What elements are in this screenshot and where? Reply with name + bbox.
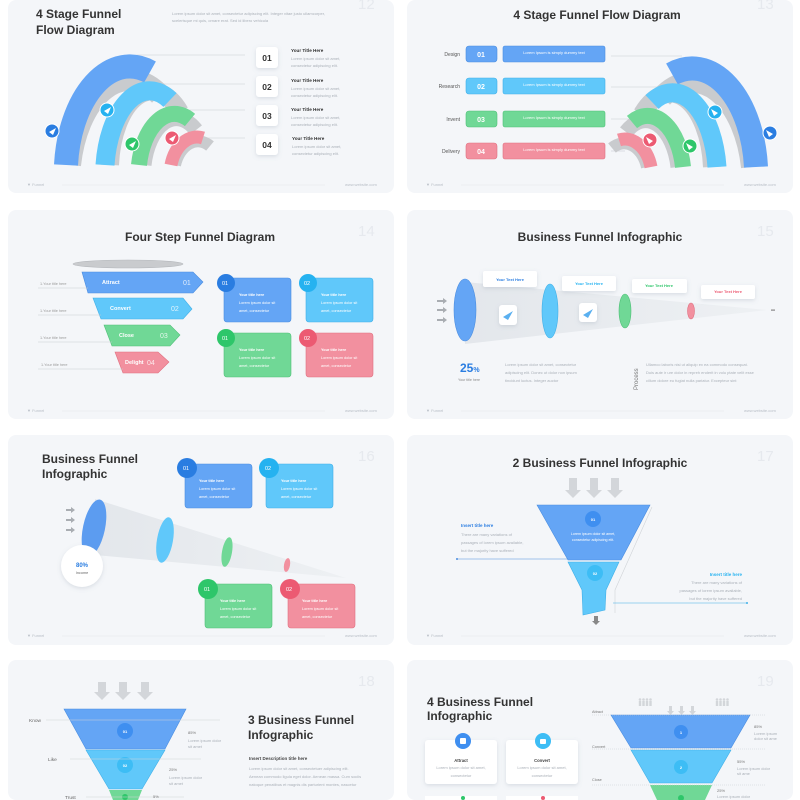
info boxes: amet, consectetur: [220, 615, 251, 619]
footer: www.website.com: [744, 182, 776, 187]
stat 25%: Your title here: [458, 378, 480, 382]
number boxes list: 02: [262, 82, 272, 92]
level labels: Close: [592, 778, 602, 782]
percentages: Lorem ipsum dolor: [188, 738, 222, 743]
text bars: Lorem Ipsum is simply dummy text: [523, 147, 586, 152]
panel: slide 15: [407, 210, 793, 419]
end dash: [771, 310, 775, 311]
info boxes: amet, consectetur: [199, 495, 230, 499]
level labels: Attract: [592, 710, 604, 714]
funnel levels: 1: [680, 730, 683, 735]
percentages: [153, 730, 222, 799]
info boxes: Your title here: [302, 599, 327, 603]
left text: but the majority have suffered: [461, 548, 514, 553]
number boxes: 04: [477, 149, 485, 156]
footer: [27, 182, 377, 187]
slide number 18: 18: [358, 673, 375, 690]
slide number 19: 19: [757, 673, 774, 690]
stat 25%: [458, 361, 480, 382]
input arrows: [94, 682, 153, 700]
number boxes list: [256, 47, 341, 156]
title: Business Funnel: [42, 452, 138, 466]
funnel top: consectetur adipiscing elit.: [572, 538, 614, 542]
panel: slide 18: [8, 660, 394, 800]
footer: ▼ Funnel: [426, 182, 443, 187]
number boxes list: consectetur adipiscing elit.: [291, 122, 338, 127]
chart: slide 13 arcs: [612, 68, 777, 167]
right text: There are many variations of: [691, 580, 743, 585]
input arrows: [66, 507, 75, 533]
footer: www.website.com: [744, 408, 776, 413]
funnel cone: [95, 499, 346, 578]
number boxes: 03: [477, 117, 485, 124]
feature cards: Lorem ipsum dolor sit amet,: [436, 765, 486, 770]
title: 2 Business Funnel Infographic: [513, 456, 688, 470]
footer: [426, 182, 776, 187]
level labels: [29, 718, 76, 800]
title: Infographic: [42, 467, 108, 481]
footer: ▼ Funnel: [27, 633, 44, 638]
title: 4 Stage Funnel Flow Diagram: [513, 8, 681, 22]
input arrows: [437, 298, 447, 323]
feature cards: consectetur: [532, 773, 553, 778]
description text: scelerisque mi quis, ornare erat. Sed id libero vehicula: [172, 18, 269, 23]
feature cards: Lorem ipsum dolor sit amet,: [517, 765, 567, 770]
info boxes: amet, consectetur: [321, 309, 352, 313]
funnel steps: Delight: [125, 360, 144, 366]
chart: slide 12 arcs: [45, 66, 210, 165]
output arrow: [592, 616, 600, 625]
number boxes list: consectetur adipiscing elit.: [292, 151, 339, 156]
funnel levels: [611, 715, 750, 800]
info boxes: 01: [222, 281, 228, 287]
text labels: Your Text Here: [575, 281, 604, 286]
info boxes: 02: [265, 466, 271, 472]
info boxes: Lorem ipsum dolor sit: [239, 356, 276, 360]
description text: Lorem ipsum dolor sit amet, consectetur adipiscing elit. Integer vitae justo ullamcorper,: [172, 11, 325, 16]
footer: [27, 633, 377, 638]
feature cards: Convert: [534, 758, 551, 763]
info boxes: Lorem ipsum dolor sit: [199, 487, 236, 491]
info boxes: Lorem ipsum dolor sit: [239, 301, 276, 305]
stage labels: [439, 52, 461, 155]
number boxes list: Lorem ipsum dolor sit amet,: [291, 56, 340, 61]
right text: but the majority have suffered: [689, 596, 742, 601]
body text: tincidunt luctus. Integer auctor: [505, 378, 559, 383]
number boxes list: consectetur adipiscing elit.: [291, 63, 338, 68]
panel: slide 15: cillum dolore eu fugiat nulla pariatur. Excepteur sint: [646, 378, 737, 383]
info boxes: 01: [222, 336, 228, 342]
info boxes: Your title here: [321, 293, 346, 297]
level labels: Like: [48, 757, 57, 763]
number boxes list: Your Title Here: [291, 107, 324, 112]
side line: [615, 507, 652, 613]
footer: ▼ Funnel: [27, 182, 44, 187]
info boxes: 01: [204, 587, 210, 593]
panel: slide 16: [8, 435, 394, 645]
footer: ▼ Funnel: [426, 408, 443, 413]
funnel steps: [82, 272, 203, 373]
panel: slide 15: Ullamco laboris nisi ut aliquip ex ea commodo consequat.: [646, 362, 748, 367]
funnel steps: Close: [119, 333, 134, 339]
left text: [456, 523, 568, 560]
level labels: [592, 710, 606, 782]
funnel bottom: [568, 562, 619, 615]
funnel top: Lorem ipsum dolor sit amet,: [571, 532, 615, 536]
footer: www.website.com: [345, 408, 377, 413]
percentages: 25%: [169, 767, 177, 772]
left text: Insert title here: [461, 523, 494, 528]
panel: slide 12: [8, 0, 394, 193]
info boxes: Your title here: [199, 479, 224, 483]
info boxes: [217, 274, 373, 377]
percentages: dolor sit ame: [754, 736, 778, 741]
description: Insert Description title here: [249, 756, 308, 761]
panel: slide 14: [8, 210, 394, 419]
info boxes: Your title here: [321, 348, 346, 352]
percentages: Lorem ipsum dolor: [717, 794, 751, 799]
number boxes list: Lorem ipsum dolor sit amet,: [291, 86, 340, 91]
percentages: sit ame: [737, 771, 751, 776]
input arrows: [565, 478, 623, 498]
panel: slide 13: [407, 0, 793, 193]
funnel top: [537, 505, 650, 560]
info boxes: amet, consectetur: [281, 495, 312, 499]
connector lines: [137, 55, 245, 138]
funnel ellipses: [77, 497, 291, 572]
funnel steps: 02: [171, 306, 179, 313]
level labels: Know: [29, 718, 42, 724]
title: 4 Business Funnel: [427, 695, 533, 709]
number boxes list: Your Title Here: [291, 78, 324, 83]
funnel levels: 01: [123, 729, 128, 734]
info boxes: Your title here: [239, 348, 264, 352]
description: natoque penatibus et magnis dis parturient montes, nascetur: [249, 782, 357, 787]
feature cards: [425, 733, 578, 800]
number boxes: 02: [477, 84, 485, 91]
left labels: 1.Your title here: [40, 282, 66, 286]
percentages: 5%: [153, 794, 159, 799]
funnel steps: Convert: [110, 306, 131, 312]
info boxes: 02: [304, 281, 310, 287]
connector lines: [611, 56, 682, 151]
left text: There are many variations of: [461, 532, 513, 537]
percentages: Lorem ipsum dolor: [169, 775, 203, 780]
funnel bottom: 02: [593, 571, 598, 576]
title: Infographic: [248, 728, 314, 742]
percentages: sit amet: [169, 781, 184, 786]
info boxes: amet, consectetur: [321, 364, 352, 368]
text bars: Lorem Ipsum is simply dummy text: [523, 115, 586, 120]
info boxes: amet, consectetur: [302, 615, 333, 619]
slide number 17: 17: [757, 448, 774, 465]
funnel ellipses: [454, 279, 694, 341]
percentages: 85%: [754, 724, 762, 729]
panel: slide 17: [407, 435, 793, 645]
right text: passages of lorem ipsum available,: [680, 588, 742, 593]
feature cards: consectetur: [451, 773, 472, 778]
info boxes: [177, 458, 355, 628]
number boxes: 01: [477, 52, 485, 59]
info boxes: Lorem ipsum dolor sit: [321, 301, 358, 305]
right text: Insert title here: [710, 572, 742, 577]
stat 25%: 25%: [460, 361, 480, 375]
funnel levels: [64, 709, 186, 800]
text bars: Lorem Ipsum is simply dummy text: [523, 82, 586, 87]
number boxes list: 01: [262, 53, 272, 63]
funnel levels: 02: [123, 763, 128, 768]
right text: [613, 572, 748, 604]
info boxes: Your title here: [239, 293, 264, 297]
footer: [426, 408, 776, 413]
funnel steps: 04: [147, 360, 155, 367]
footer: ▼ Funnel: [426, 633, 443, 638]
stat circle 80%: 80%: [76, 563, 89, 569]
process label: Process: [634, 368, 640, 390]
stage labels: Design: [444, 52, 460, 58]
footer: [426, 633, 776, 638]
info boxes: Lorem ipsum dolor sit: [281, 487, 318, 491]
footer: [27, 408, 377, 413]
info boxes: amet, consectetur: [239, 309, 270, 313]
funnel steps: 03: [160, 333, 168, 340]
text labels: [483, 271, 755, 299]
number boxes list: Lorem ipsum dolor sit amet,: [292, 144, 341, 149]
info boxes: Your title here: [220, 599, 245, 603]
info boxes: Your title here: [281, 479, 306, 483]
stage labels: Research: [439, 84, 460, 90]
footer: www.website.com: [345, 182, 377, 187]
percentages: Lorem ipsum dolor: [737, 766, 771, 771]
funnel cone: [465, 282, 767, 344]
left labels: [38, 282, 123, 369]
left labels: 1.Your title here: [40, 336, 66, 340]
percentages: 55%: [737, 759, 745, 764]
percentages: 85%: [188, 730, 196, 735]
text bars: Lorem Ipsum is simply dummy text: [523, 50, 586, 55]
people icons and arrows: [639, 698, 729, 715]
icon boxes: [499, 303, 597, 325]
slide number 15: 15: [757, 223, 774, 240]
funnel steps: 01: [183, 280, 191, 287]
number boxes list: Your Title Here: [292, 136, 325, 141]
left text: passages of lorem ipsum available,: [461, 540, 523, 545]
stage labels: Invent: [446, 117, 461, 123]
funnel top: 01: [591, 517, 596, 522]
left labels: 1.Your title here: [40, 309, 66, 313]
title: Infographic: [427, 709, 493, 723]
text labels: Your Text Here: [714, 289, 743, 294]
title: Business Funnel Infographic: [518, 230, 683, 244]
title: 4 Stage Funnel: [36, 7, 121, 21]
description: [249, 756, 361, 787]
feature cards: Attract: [454, 758, 468, 763]
slide number 14: 14: [358, 223, 375, 240]
number boxes: [466, 46, 497, 159]
panel: slide 19: [407, 660, 793, 800]
number boxes list: Lorem ipsum dolor sit amet,: [291, 115, 340, 120]
info boxes: Lorem ipsum dolor sit: [321, 356, 358, 360]
title: Flow Diagram: [36, 23, 115, 37]
number boxes list: 04: [262, 140, 272, 150]
percentages: [717, 724, 778, 799]
stage labels: Delivery: [442, 149, 460, 155]
info boxes: amet, consectetur: [239, 364, 270, 368]
info boxes: 02: [304, 336, 310, 342]
text bars: [503, 46, 605, 159]
text labels: Your Text Here: [645, 283, 674, 288]
text labels: Your Text Here: [496, 277, 525, 282]
number boxes list: 03: [262, 111, 272, 121]
percentages: Lorem ipsum: [754, 731, 778, 736]
info boxes: Lorem ipsum dolor sit: [302, 607, 339, 611]
description: Lorem ipsum dolor sit amet, consectetuer adipiscing elit.: [249, 766, 349, 771]
percentages: sit amet: [188, 744, 203, 749]
info boxes: Lorem ipsum dolor sit: [220, 607, 257, 611]
left labels: 1.Your title here: [41, 363, 67, 367]
funnel levels: 2: [680, 765, 683, 770]
footer: www.website.com: [345, 633, 377, 638]
number boxes list: Your Title Here: [291, 48, 324, 53]
funnel steps: Attract: [102, 280, 120, 286]
info boxes: 02: [286, 587, 292, 593]
info boxes: 01: [183, 466, 189, 472]
stat circle 80%: [61, 545, 103, 587]
percentages: 25%: [717, 788, 725, 793]
body text: Lorem ipsum dolor sit amet, consectetur: [505, 362, 577, 367]
funnel rim: [73, 260, 183, 268]
body text: adipiscing elit. Donec ut dolor non ipsum: [505, 370, 577, 375]
title: 3 Business Funnel: [248, 713, 354, 727]
number boxes list: consectetur adipiscing elit.: [291, 93, 338, 98]
panel: slide 15: Duis aute ir ure dolor in repreh enderit in volu ptate velit esse: [646, 370, 755, 375]
stat circle 80%: Income: [76, 571, 88, 575]
description: Aenean commodo ligula eget dolor. Aenean massa. Cum sociis: [249, 774, 361, 779]
level labels: Convert: [592, 745, 606, 749]
title: Four Step Funnel Diagram: [125, 230, 275, 244]
slide number 16: 16: [358, 448, 375, 465]
footer: www.website.com: [744, 633, 776, 638]
footer: ▼ Funnel: [27, 408, 44, 413]
